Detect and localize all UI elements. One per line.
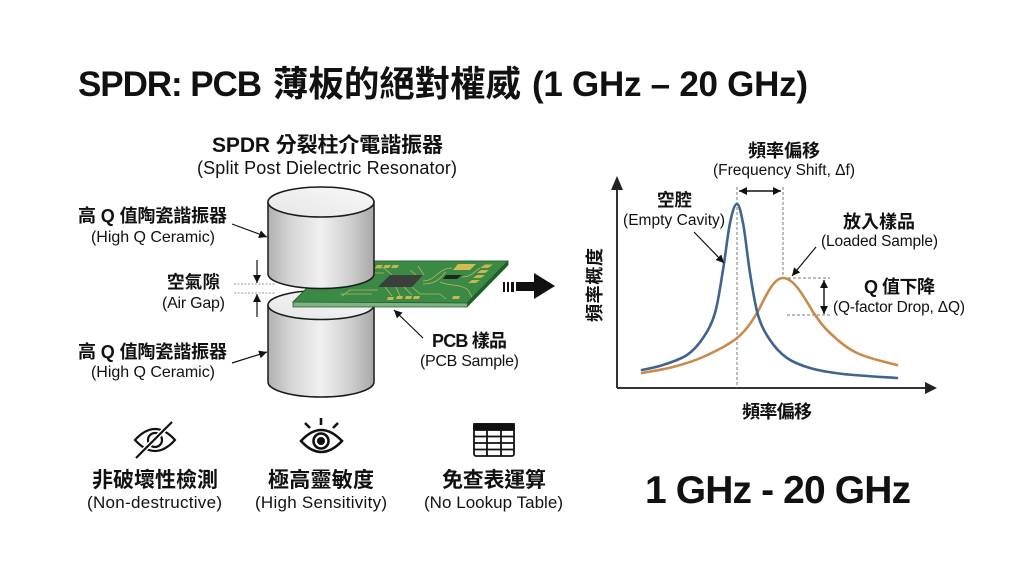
curve: loaded sample: [642, 278, 897, 373]
icon: crossed-out eye: [135, 422, 175, 458]
label: upper high Q ceramic: [78, 205, 227, 246]
arrow: to empty cavity curve: [694, 232, 724, 263]
label: air gap: [162, 272, 225, 312]
label: PCB sample: [420, 331, 519, 370]
label: lower high Q ceramic: [78, 341, 227, 381]
label: Q drop: (Q-factor Drop, ΔQ): [833, 299, 965, 316]
label: loaded sample: [821, 212, 938, 250]
feature: no lookup table: 免查表運算: [442, 469, 546, 492]
label: empty cavity: 空腔: [657, 190, 692, 210]
icon: eye with rays: [301, 418, 342, 452]
label: frequency shift: [713, 141, 855, 179]
label: loaded sample: (Loaded Sample): [821, 233, 938, 250]
chart guide lines: [737, 187, 830, 388]
title: SPDR: PCB: [78, 65, 262, 104]
PCB sample: [293, 261, 508, 307]
diagram heading: SPDR 分裂柱介電諧振器: [212, 134, 443, 157]
air gap markers: [234, 260, 275, 317]
label: frequency shift: (Frequency Shift, Δf): [713, 162, 855, 179]
curve: empty cavity: [642, 204, 897, 378]
feature: no lookup table: [424, 424, 563, 512]
label: empty cavity: (Empty Cavity): [623, 212, 725, 229]
diagram heading: (Split Post Dielectric Resonator): [197, 158, 457, 178]
arrow: to lower cylinder: [232, 352, 267, 363]
label: air gap: 空氣隙: [167, 272, 220, 292]
x axis label: 頻率偏移: [742, 402, 812, 422]
title: 薄板的絕對權威: [273, 64, 521, 104]
label: upper high Q ceramic: 高 Q 值陶瓷諧振器: [78, 205, 227, 226]
feature: high sensitivity: 極高靈敏度: [268, 468, 374, 492]
feature: non-destructive: 非破壞性檢測: [92, 468, 218, 492]
label: upper high Q ceramic: (High Q Ceramic): [91, 229, 215, 246]
panel: resonance chart: [585, 141, 965, 422]
chart axes: [611, 176, 937, 394]
feature: non-destructive: [87, 422, 222, 512]
title: (1 GHz – 20 GHz): [532, 65, 808, 104]
label: Q drop: [833, 277, 965, 316]
icon: table: [474, 424, 514, 456]
label: Q drop: Q 值下降: [864, 277, 935, 297]
Q drop double arrow: [823, 280, 825, 314]
feature: non-destructive: (Non-destructive): [87, 493, 222, 512]
arrow: to loaded sample curve: [792, 247, 816, 276]
diagram heading: [197, 134, 457, 178]
upper ceramic cylinder: [268, 187, 374, 288]
frequency shift double arrow: [739, 190, 781, 192]
label: loaded sample: 放入樣品: [843, 212, 915, 232]
arrow: to PCB: [394, 310, 423, 338]
feature: no lookup table: (No Lookup Table): [424, 493, 563, 512]
label: PCB sample: PCB 樣品: [432, 331, 507, 351]
feature: high sensitivity: [255, 418, 387, 512]
feature: high sensitivity: (High Sensitivity): [255, 493, 387, 512]
frequency range callout: 1 GHz - 20 GHz: [645, 469, 911, 512]
label: empty cavity: [623, 190, 725, 229]
lower ceramic cylinder: [268, 290, 374, 397]
arrow: to upper cylinder: [232, 224, 267, 237]
label: lower high Q ceramic: (High Q Ceramic): [91, 364, 215, 381]
arrow: diagram to chart: [503, 273, 555, 299]
y axis label: 頻率概度: [585, 248, 605, 322]
label: air gap: (Air Gap): [162, 295, 225, 312]
label: PCB sample: (PCB Sample): [420, 353, 519, 370]
label: frequency shift: 頻率偏移: [748, 141, 820, 161]
title: [78, 64, 808, 104]
label: lower high Q ceramic: 高 Q 值陶瓷諧振器: [78, 341, 227, 362]
chip: [378, 275, 423, 287]
panel: SPDR resonator diagram: [78, 134, 519, 397]
